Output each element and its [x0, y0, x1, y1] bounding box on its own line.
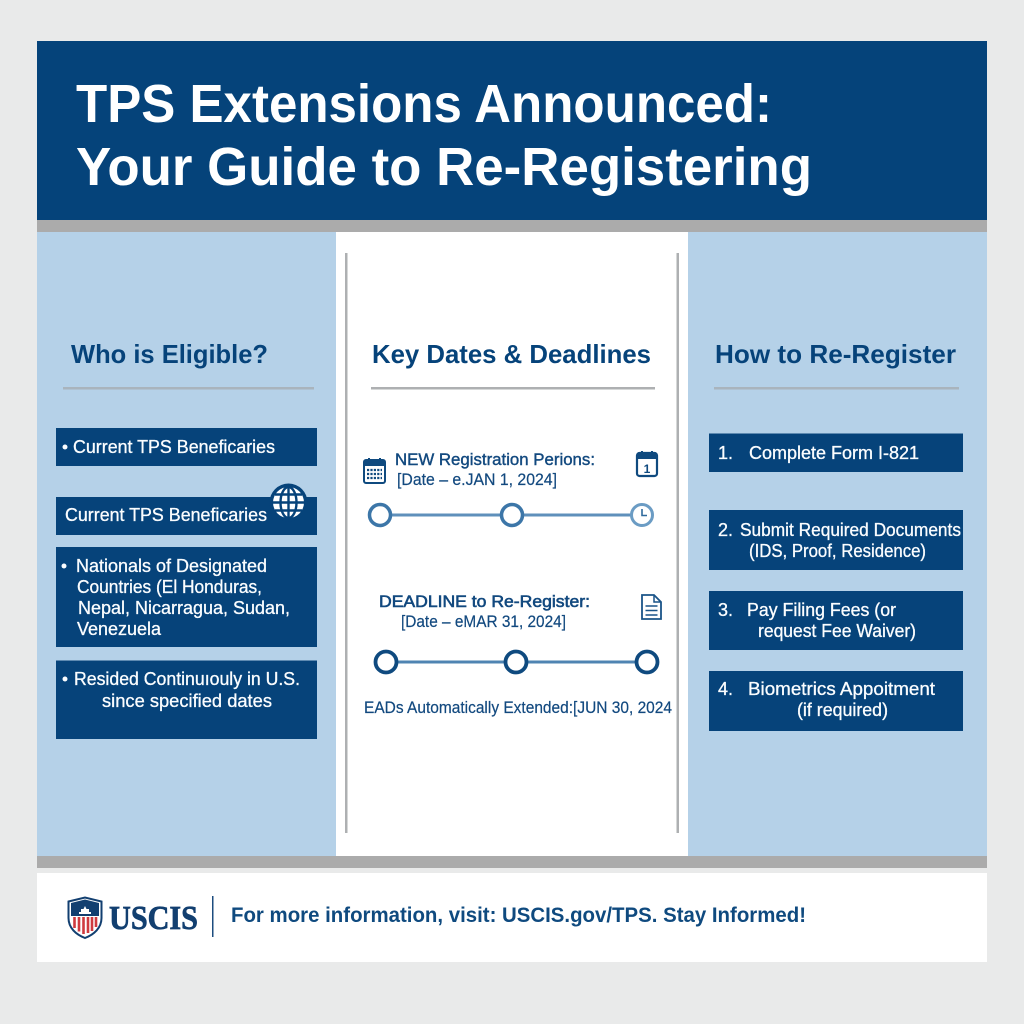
step 1 [709, 434, 963, 472]
deadline text: DEADLINE to Re-Register: [379, 593, 590, 611]
footer call to action: For more information, visit: USCIS.gov/TPS. Stay Informed! [231, 904, 806, 927]
step 4: (if required) [797, 700, 888, 720]
header banner [37, 41, 987, 220]
step 3: 3. [718, 600, 733, 620]
step 3: Pay Filing Fees (or [747, 600, 896, 620]
eligibility item: nationals: Nepal, Nicarragua, Sudan, [78, 598, 290, 618]
eligibility item: nationals: Nationals of Designated [76, 556, 267, 576]
eligibility item: residence: Resided Continuıouly in U.S. [74, 669, 300, 689]
step 3 [709, 591, 963, 650]
eligibility item: residence [56, 660, 317, 739]
step 3: request Fee Waiver) [758, 621, 916, 641]
icon: globe [270, 484, 308, 522]
panel: who is eligible [37, 232, 336, 856]
heading: who is eligible: Who is Eligible? [71, 339, 268, 369]
panel: key dates and deadlines [336, 232, 688, 856]
eligibility item: beneficiaries with globe [56, 484, 317, 535]
step 4: Biometrics Appoitment [748, 679, 935, 699]
icon: document [642, 595, 661, 619]
step 4 [709, 671, 963, 731]
title: Your Guide to Re-Registering [76, 137, 812, 197]
icon: calendar day 1: 1 [644, 462, 651, 476]
eligibility item: residence: since specified dates [102, 691, 272, 711]
eligibility item: current beneficiaries: Current TPS Beneficaries [73, 437, 275, 457]
step 2: (IDS, Proof, Residence) [749, 541, 926, 561]
step 2: Submit Required Documents [740, 520, 961, 540]
deadline text [379, 593, 590, 631]
registration period text: NEW Registration Perions: [395, 451, 595, 469]
deadline text: [Date – eMAR 31, 2024] [401, 613, 566, 631]
icon: calendar day 1 [637, 451, 657, 476]
icon: USCIS shield [68, 898, 102, 938]
footer [37, 873, 987, 962]
timeline: deadline [376, 652, 658, 672]
step 2: 2. [718, 520, 733, 540]
registration period text: [Date – e.JAN 1, 2024] [397, 471, 557, 489]
heading: how to re-register: How to Re-Register [715, 339, 956, 369]
title [76, 74, 812, 197]
step 4: 4. [718, 679, 733, 699]
heading: key dates: Key Dates & Deadlines [372, 339, 651, 369]
EAD extension text: EADs Automatically Extended:[JUN 30, 2024 [364, 699, 672, 717]
step 2 [709, 510, 963, 570]
eligibility item: nationals [56, 547, 317, 647]
registration period text [395, 451, 595, 489]
eligibility item: beneficiaries with globe: Current TPS Beneficaries [65, 505, 267, 525]
step 1: Complete Form I-821 [749, 443, 919, 463]
icon: calendar grid [364, 458, 385, 483]
eligibility item: nationals: Countries (El Honduras, [77, 577, 262, 597]
eligibility item: current beneficiaries [56, 428, 317, 466]
timeline: registration [370, 504, 652, 526]
USCIS wordmark: USCIS [109, 900, 198, 937]
step 1: 1. [718, 443, 733, 463]
panel: how to re-register [688, 232, 987, 856]
eligibility item: nationals: Venezuela [77, 619, 162, 639]
title: TPS Extensions Announced: [76, 74, 772, 134]
